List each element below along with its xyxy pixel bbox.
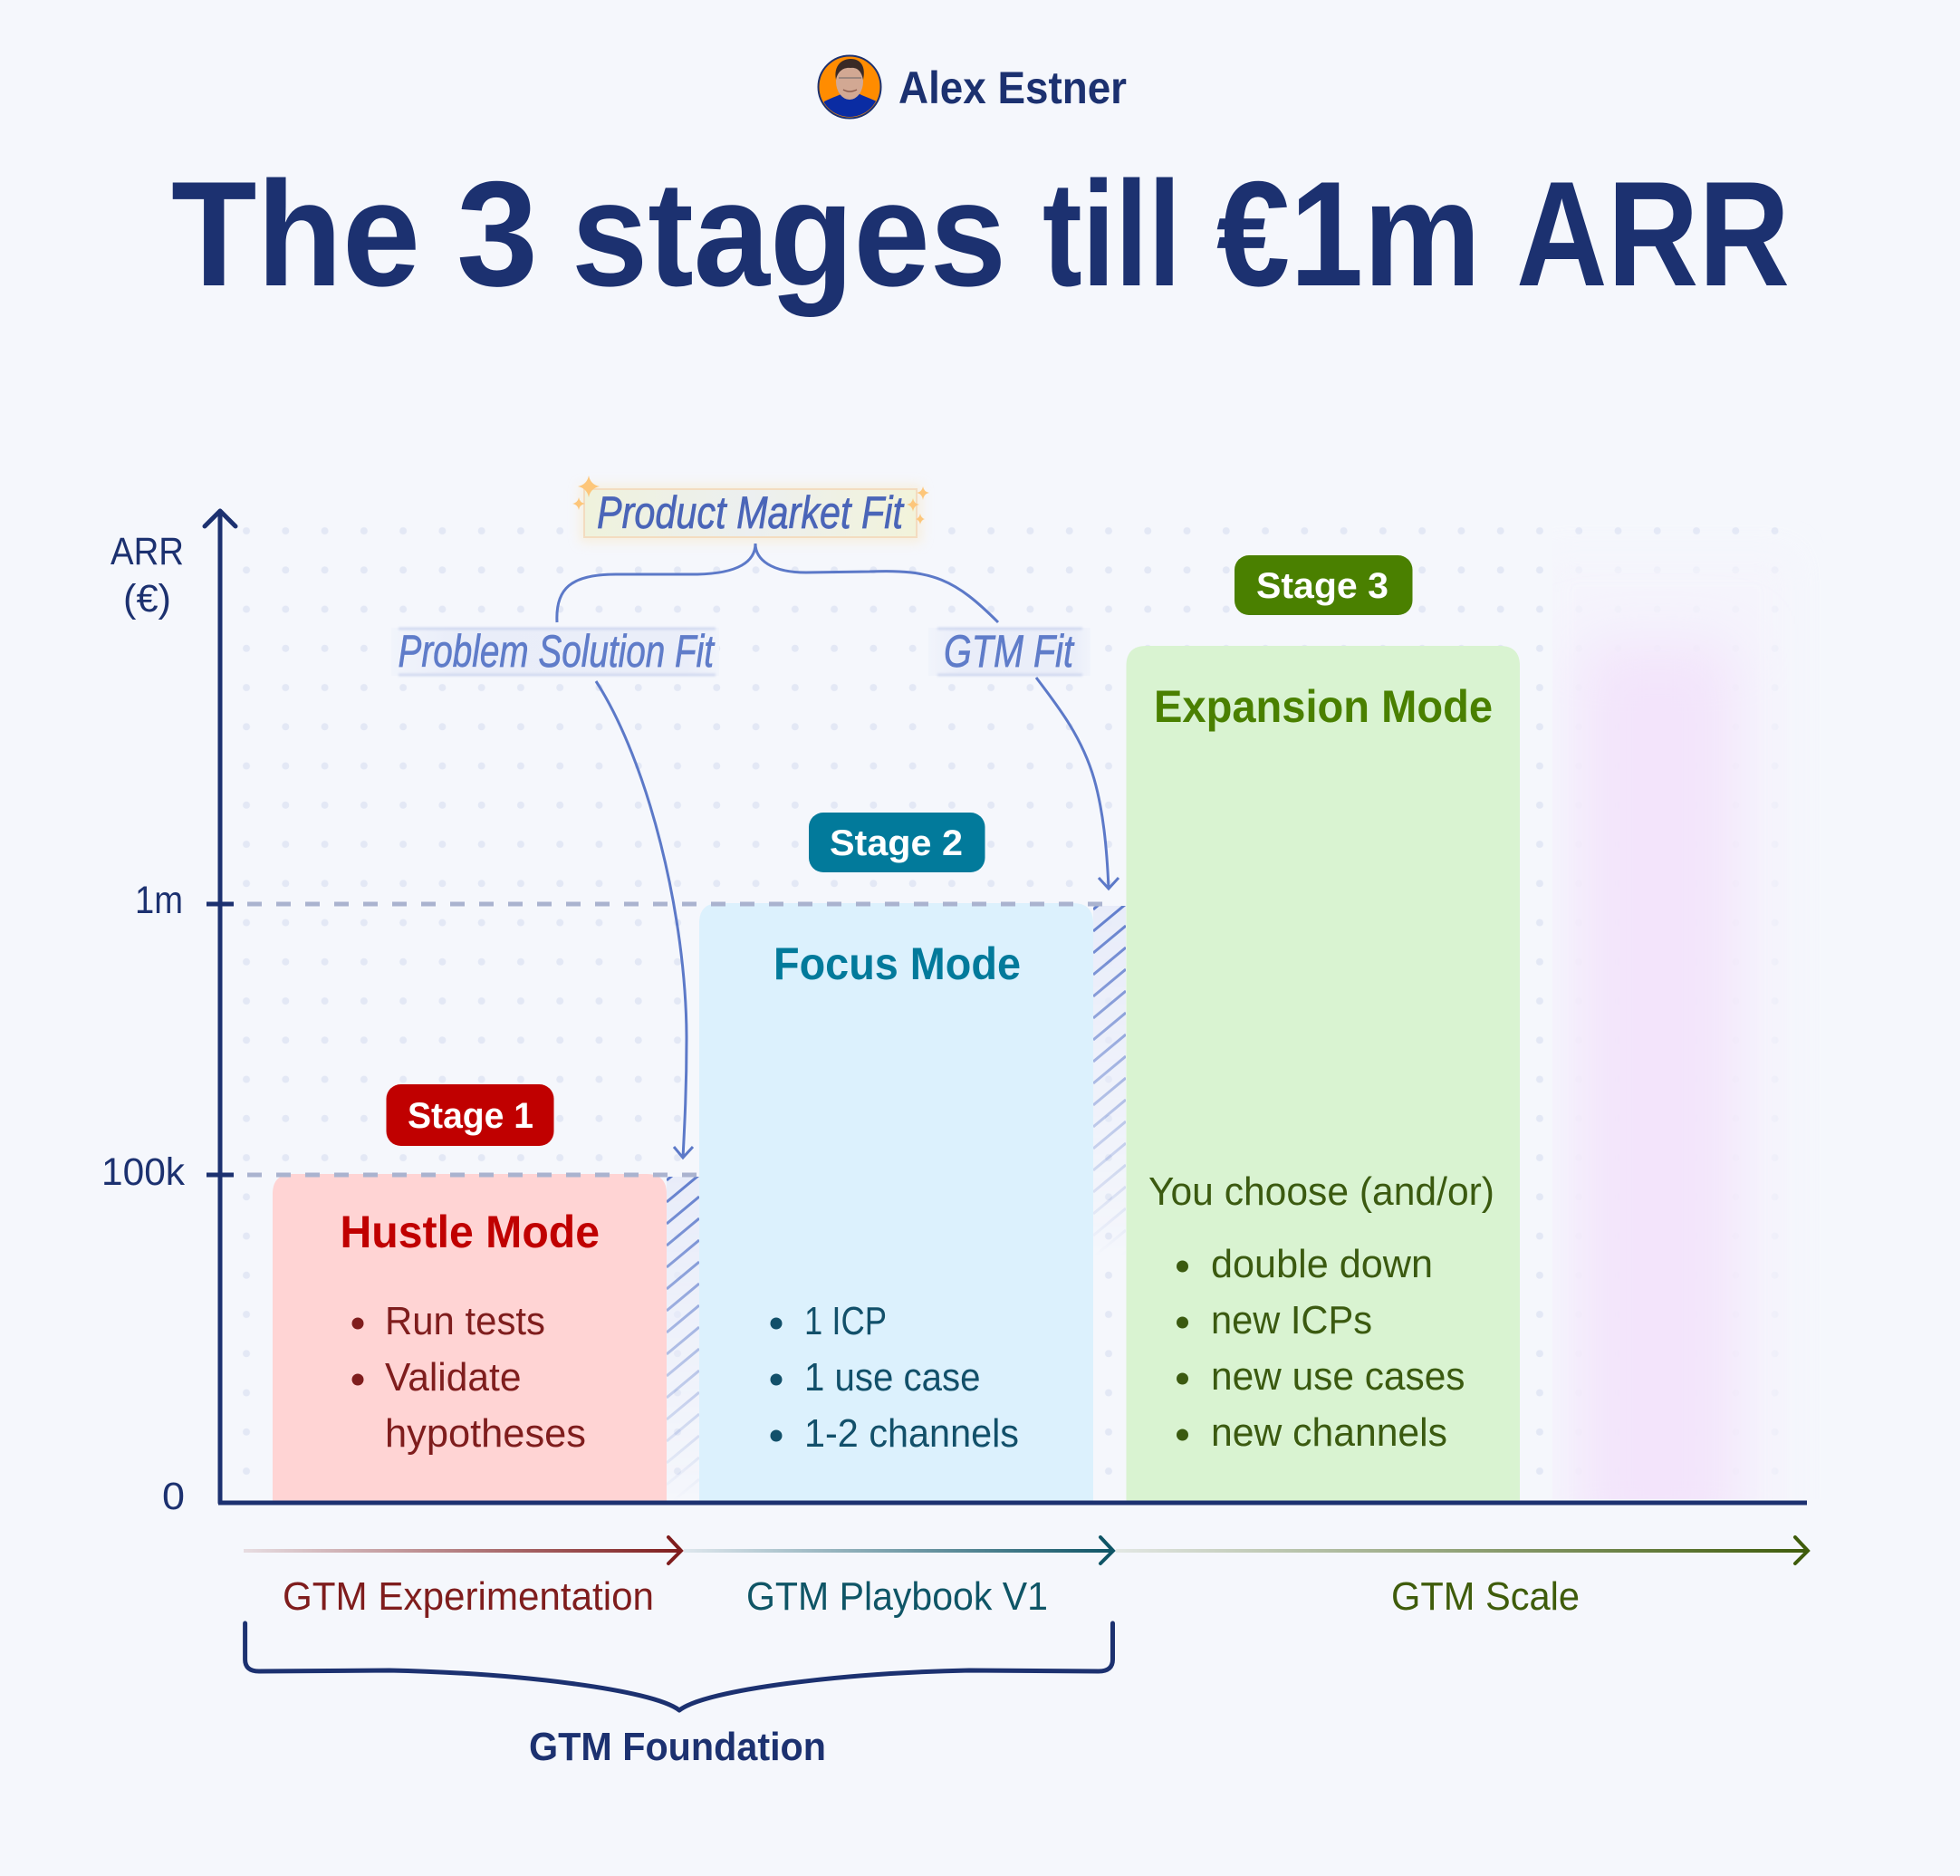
title: The [171, 150, 420, 317]
timeline: gtm playbook v1 [684, 1537, 1113, 1619]
ticks [207, 904, 234, 1175]
badge: stage 1: Stage 1 [408, 1096, 533, 1136]
title [171, 150, 1790, 317]
label: GTM Playbook V1 [746, 1574, 1048, 1619]
bullet list: 1 use case [804, 1355, 980, 1400]
bullet list: 1-2 channels [804, 1411, 1019, 1456]
intro text: You choose (and/or) [1148, 1169, 1494, 1214]
y axis labels: ARR [110, 530, 184, 573]
bullet list [770, 1299, 1019, 1456]
y axis labels: (€) [123, 577, 171, 621]
panel: stage 2 focus mode [699, 903, 1093, 1501]
label: Product Market Fit [597, 487, 905, 538]
hatch: after stage 2 [1093, 906, 1126, 1255]
bullet list: Run tests [385, 1299, 545, 1343]
bullet list: double down [1211, 1242, 1433, 1286]
dashed guides [247, 904, 1108, 1175]
bullet list [351, 1299, 586, 1456]
callout: product market fit [572, 476, 929, 543]
title: €1m [1216, 150, 1481, 317]
card [273, 1174, 667, 1501]
card [699, 903, 1093, 1501]
chart axes [205, 511, 1807, 1503]
timeline: gtm experimentation [244, 1537, 681, 1619]
arrow: problem solution fit to 100k [596, 681, 693, 1158]
bullet list: new channels [1211, 1410, 1447, 1455]
author: avatar and name [819, 56, 1127, 120]
heading: Hustle Mode [341, 1207, 600, 1257]
callout: gtm fit: GTM Fit [944, 626, 1075, 677]
label: gtm foundation: GTM Foundation [529, 1725, 826, 1769]
bullet list: hypotheses [385, 1411, 586, 1456]
box [584, 489, 917, 537]
y axis labels: 100k [101, 1150, 185, 1194]
heading: Expansion Mode [1154, 681, 1493, 732]
arrow [684, 1537, 1113, 1563]
dot grid [226, 511, 1793, 1494]
label: GTM Experimentation [283, 1574, 654, 1619]
timeline: gtm scale [1116, 1537, 1808, 1619]
badge: stage 2 [809, 813, 985, 872]
author name: Alex Estner [898, 63, 1127, 113]
panel: stage 3 expansion mode [1127, 646, 1520, 1501]
y axis labels: 1m [135, 879, 183, 922]
brace: gtm foundation [245, 1623, 1113, 1710]
bullet list [1177, 1242, 1465, 1455]
title: ARR [1516, 150, 1790, 317]
y axis with arrow [205, 511, 235, 1503]
icon: sparkles [572, 476, 929, 524]
badge: stage 3 [1235, 555, 1413, 615]
badge: stage 2: Stage 2 [830, 823, 963, 863]
title: 3 [456, 150, 538, 317]
title: stages [572, 150, 1006, 317]
arrow: gtm fit to 1m [1036, 678, 1119, 889]
hatch: after stage 1 [667, 1177, 699, 1501]
icon: avatar portrait [819, 56, 880, 120]
heading: Focus Mode [773, 938, 1021, 989]
title: till [1042, 150, 1181, 317]
decorative faded future zone [1569, 567, 1779, 1499]
bullet list: Validate [385, 1355, 522, 1400]
panel: stage 1 hustle mode [273, 1174, 667, 1501]
bullet list: new ICPs [1211, 1298, 1372, 1342]
y axis labels: 0 [162, 1475, 185, 1518]
brace: connects fits to product market fit [557, 544, 998, 622]
card [1127, 646, 1520, 1501]
label: GTM Scale [1391, 1574, 1580, 1619]
arrow [1116, 1537, 1808, 1563]
callout: problem solution fit: Problem Solution Fit [399, 626, 716, 677]
bullet list: new use cases [1211, 1354, 1465, 1399]
bullet list: 1 ICP [804, 1299, 887, 1343]
glow [580, 485, 922, 543]
arrow [244, 1537, 681, 1563]
y axis labels [101, 530, 185, 1518]
badge: stage 3: Stage 3 [1256, 566, 1388, 606]
badge: stage 1 [386, 1084, 554, 1146]
x axis [218, 1500, 1807, 1506]
